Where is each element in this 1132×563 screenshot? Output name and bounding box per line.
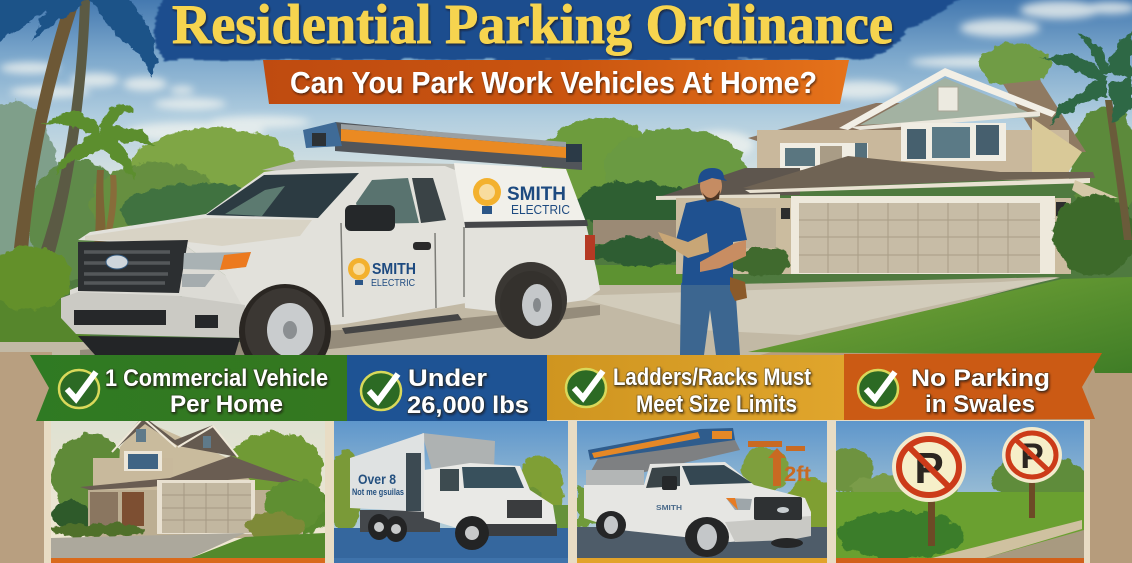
orange ribbon shape bbox=[844, 353, 1102, 420]
tail light bbox=[585, 235, 595, 260]
ladder on rack bbox=[303, 122, 582, 170]
box truck bbox=[350, 433, 557, 550]
bumper bbox=[61, 292, 245, 338]
panel trees bbox=[327, 450, 564, 530]
front wheel bbox=[239, 284, 331, 380]
cargo box rear face bbox=[422, 433, 495, 470]
panel right shrub bbox=[264, 478, 321, 521]
head bbox=[700, 172, 722, 200]
label text bbox=[613, 364, 811, 418]
large no-parking sign bbox=[892, 432, 966, 502]
windshield bbox=[206, 173, 359, 218]
box truck wheels bbox=[368, 514, 489, 550]
panel frame posts bbox=[44, 420, 1090, 563]
panel trees bbox=[52, 432, 330, 535]
ribbon: 1 commercial vehicle bbox=[30, 355, 348, 421]
ladder blue end bbox=[303, 122, 342, 148]
palm trunks bbox=[14, 0, 80, 250]
left palm trees bbox=[0, 0, 156, 256]
door logo bbox=[348, 258, 416, 289]
pickup mirror bbox=[662, 476, 677, 490]
sign posts bbox=[928, 482, 1035, 546]
flower bed bbox=[732, 248, 792, 276]
small no-parking sign: P bbox=[1020, 437, 1044, 476]
panel curb bbox=[932, 520, 1082, 558]
back roof bbox=[1003, 80, 1086, 152]
door logo: SMITH bbox=[372, 261, 416, 278]
panel hedge bbox=[50, 523, 146, 537]
yellow ribbon shape bbox=[547, 355, 844, 420]
rear wheel arch bbox=[495, 262, 567, 338]
truck ground shadow bbox=[80, 305, 600, 358]
truck bed bbox=[462, 224, 600, 312]
pickup bumper bbox=[725, 516, 811, 542]
panel sky bbox=[836, 421, 1084, 558]
box label bbox=[352, 474, 404, 497]
polo shirt bbox=[676, 199, 747, 285]
panel trees bbox=[577, 448, 834, 533]
label text bbox=[407, 365, 529, 419]
upper right windows bbox=[901, 123, 1006, 161]
panel sky bbox=[51, 421, 325, 558]
ribbon: ladder limits bbox=[547, 355, 844, 420]
fog light bbox=[182, 274, 215, 287]
hood highlight bbox=[85, 218, 312, 246]
house bbox=[656, 68, 1118, 276]
swale grass bbox=[836, 511, 964, 559]
main lower roof bbox=[743, 156, 1095, 190]
topper logo bbox=[473, 178, 570, 217]
label text: Meet Size Limits bbox=[636, 391, 797, 418]
panel bush bbox=[245, 512, 305, 540]
label text bbox=[105, 365, 328, 418]
gable fascia bbox=[850, 111, 1040, 130]
pickup wheels bbox=[685, 517, 729, 557]
cap bbox=[698, 168, 727, 183]
left hedge bbox=[0, 246, 72, 310]
cab bbox=[424, 463, 556, 528]
panel driveway bbox=[51, 533, 245, 558]
cab windshield bbox=[462, 467, 524, 488]
binder bbox=[658, 232, 709, 258]
panel treeline bbox=[828, 446, 1090, 502]
right shrubs bbox=[1053, 195, 1132, 275]
large no-parking sign: P bbox=[914, 444, 944, 493]
rear wheel bbox=[500, 271, 562, 339]
small no-parking sign bbox=[1002, 427, 1062, 483]
garage door frame bbox=[791, 196, 1055, 274]
work pickup truck bbox=[61, 122, 600, 380]
upper wall bbox=[757, 130, 1069, 180]
door handle bbox=[413, 242, 431, 250]
side mirror bbox=[345, 205, 395, 231]
door outlines bbox=[341, 223, 464, 317]
subtitle text: Can You Park Work Vehicles At Home? bbox=[290, 65, 817, 100]
cab and hood bbox=[78, 166, 466, 332]
ribbon: no swale parking bbox=[844, 353, 1102, 420]
background fence bbox=[593, 220, 678, 244]
panel lawn strip bbox=[553, 505, 568, 528]
side window bbox=[356, 178, 419, 224]
man with clipboard bbox=[658, 168, 747, 355]
porch roof bbox=[656, 168, 800, 198]
background trees bbox=[0, 43, 1132, 300]
green ribbon shape bbox=[30, 355, 348, 421]
panel: under 26,000 lbs box truck bbox=[327, 421, 568, 558]
check icon bbox=[361, 372, 401, 410]
box label: Over 8 bbox=[358, 472, 396, 487]
cargo door bbox=[406, 453, 421, 511]
door decal: SMITH bbox=[656, 505, 682, 512]
panel pavement bbox=[985, 530, 1084, 558]
box label: Not me gsuilas bbox=[352, 487, 404, 497]
label text bbox=[911, 365, 1050, 418]
cab bumper bbox=[480, 524, 557, 536]
rear side window bbox=[412, 178, 446, 223]
wood background lower bbox=[0, 352, 1132, 563]
panel ladder bbox=[588, 428, 735, 460]
subtitle ribbon bbox=[263, 60, 849, 104]
lower front body bbox=[70, 245, 250, 320]
wall lamps bbox=[781, 208, 790, 219]
panel road bbox=[334, 528, 568, 558]
topper bbox=[454, 163, 586, 224]
cab side window bbox=[440, 469, 459, 491]
title banner brush stroke bbox=[154, 0, 965, 60]
garage door bbox=[799, 203, 1040, 273]
label text: 26,000 lbs bbox=[407, 392, 529, 419]
panel: one commercial vehicle bbox=[50, 416, 330, 558]
door logo: ELECTRIC bbox=[371, 278, 415, 289]
bulb icon bbox=[348, 258, 370, 285]
panel lawn bbox=[191, 533, 325, 558]
2ft height arrow: 2ft bbox=[784, 463, 811, 486]
side door bbox=[739, 208, 776, 248]
label text: Under bbox=[408, 365, 487, 392]
label text: Per Home bbox=[170, 391, 283, 418]
panel pickup bbox=[584, 428, 811, 557]
clouds bbox=[0, 1, 1132, 159]
blue ribbon shape bbox=[347, 355, 547, 421]
cargo box side bbox=[350, 433, 426, 512]
ribbon: weight limit bbox=[347, 355, 547, 421]
bulb icon bbox=[473, 178, 501, 214]
panel sky bbox=[334, 421, 568, 528]
lower backdrop bbox=[0, 178, 1132, 348]
topper logo: ELECTRIC bbox=[511, 203, 570, 217]
grille bbox=[78, 240, 188, 293]
ground: lawns and driveway bbox=[0, 265, 1132, 373]
headlight bbox=[183, 252, 251, 270]
lower wall bbox=[676, 198, 1071, 274]
pickup grille bbox=[754, 497, 802, 520]
panel lawn bbox=[836, 492, 1084, 558]
check icon bbox=[566, 369, 606, 407]
panel rack bbox=[592, 440, 740, 472]
roof rack bbox=[262, 160, 460, 172]
hedge behind fence bbox=[592, 238, 688, 266]
panel sky bbox=[577, 421, 827, 527]
label text: in Swales bbox=[925, 391, 1035, 418]
left roof bbox=[748, 103, 950, 142]
palm fronds bbox=[0, 0, 156, 76]
pickup headlight bbox=[726, 498, 752, 510]
ladder orange side bbox=[341, 129, 566, 158]
jeans bbox=[680, 283, 740, 355]
panel house bbox=[80, 416, 314, 538]
label text: No Parking bbox=[911, 365, 1050, 392]
front lawn bbox=[748, 277, 1132, 373]
panel: no parking in swales bbox=[828, 421, 1090, 559]
cab grille bbox=[507, 500, 542, 518]
sky background bbox=[0, 0, 1132, 180]
gable bbox=[860, 78, 1040, 125]
beard bbox=[702, 190, 720, 202]
arm bbox=[700, 240, 746, 272]
panel road bbox=[577, 527, 827, 558]
gable vent bbox=[938, 87, 958, 111]
check icon bbox=[59, 370, 99, 408]
panel: ladder and rack limits bbox=[577, 421, 834, 558]
ribbon shape bbox=[263, 60, 849, 104]
topper logo: SMITH bbox=[507, 184, 566, 205]
check icon bbox=[858, 370, 898, 408]
pickup windows bbox=[646, 466, 680, 488]
lower left windows bbox=[780, 143, 868, 170]
running board bbox=[342, 314, 462, 334]
emblem bbox=[106, 255, 128, 269]
label text: Ladders/Racks Must bbox=[613, 364, 811, 391]
pickup body bbox=[584, 462, 811, 542]
right palm tree bbox=[1042, 30, 1132, 240]
panel garage bbox=[157, 480, 255, 534]
topper trim bbox=[460, 220, 588, 228]
label text: 1 Commercial Vehicle bbox=[105, 365, 328, 392]
tool pouch bbox=[730, 277, 747, 301]
2ft height arrow bbox=[748, 441, 811, 486]
bottom colour strips bbox=[51, 558, 1084, 563]
